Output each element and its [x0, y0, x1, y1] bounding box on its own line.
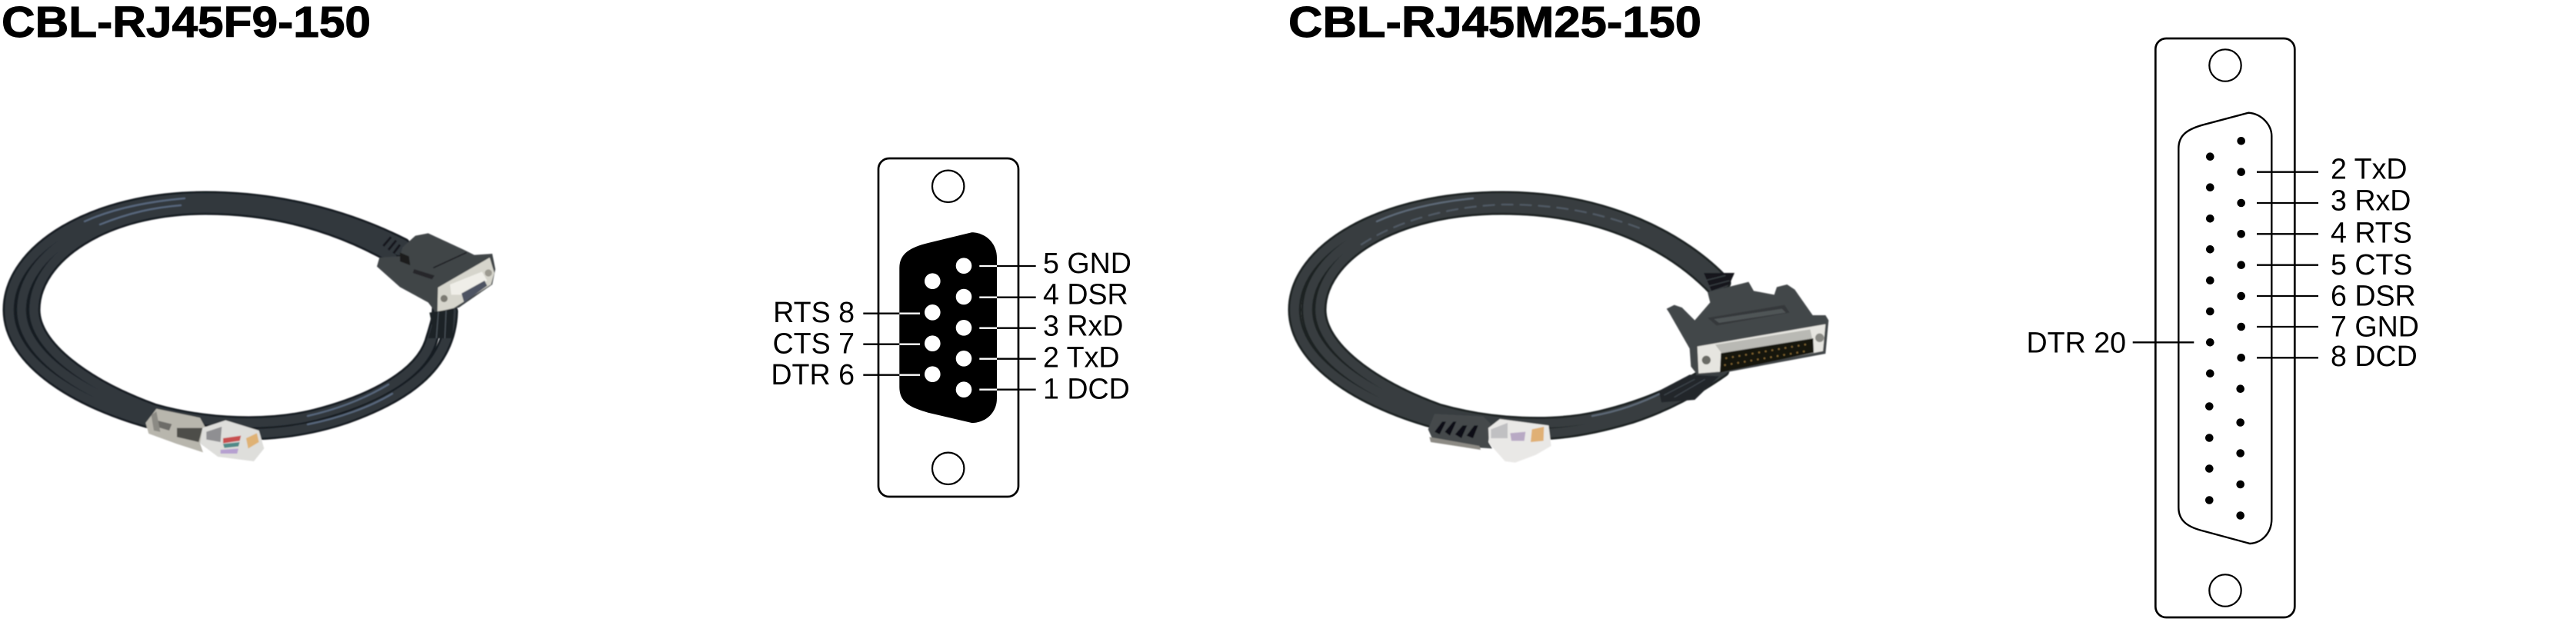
pin labels: 8 DCD	[2331, 340, 2418, 372]
pin labels: CTS 7	[772, 327, 855, 359]
pin labels: 6 DSR	[2331, 280, 2416, 312]
RJ45 plug with dark boot	[1428, 414, 1551, 463]
photo: DB9 female to RJ45 cable	[9, 198, 495, 461]
pin labels: RTS 8	[773, 296, 855, 328]
pin labels: 5 GND	[1043, 247, 1131, 279]
pin labels: 1 DCD	[1043, 372, 1130, 404]
mounting plate	[2155, 38, 2294, 617]
pin labels: 5 CTS	[2331, 248, 2412, 281]
photo: DB25 male to RJ45 cable	[1295, 198, 1828, 463]
pin labels: 4 DSR	[1043, 278, 1128, 311]
pinout: DB9 female	[771, 158, 1131, 497]
pin labels: 3 RxD	[2331, 185, 2411, 217]
mounting holes	[2209, 49, 2241, 607]
cable coil	[9, 198, 452, 434]
D-shell	[899, 232, 997, 423]
DB25 male connector	[1659, 273, 1828, 402]
pins	[2205, 137, 2245, 520]
cable coil	[1295, 198, 1725, 434]
leader lines	[863, 266, 1036, 390]
pin labels: DTR 20	[2027, 326, 2126, 358]
pin labels	[2027, 152, 2419, 372]
pin labels: 3 RxD	[1043, 310, 1123, 342]
pin labels: 4 RTS	[2331, 217, 2412, 249]
DB9 female connector	[377, 233, 495, 338]
mounting plate	[878, 158, 1018, 497]
pin labels: DTR 6	[771, 358, 855, 391]
pinout: DB25 male	[2027, 38, 2419, 617]
RJ45 plug with clear boot	[145, 409, 264, 461]
pin labels: 2 TxD	[2331, 152, 2408, 185]
mounting holes	[932, 171, 964, 484]
D-shell outline	[2178, 113, 2271, 544]
leader lines	[2133, 172, 2318, 358]
pins	[925, 258, 971, 397]
pin labels	[771, 247, 1131, 404]
pin labels: 2 TxD	[1043, 341, 1120, 373]
pin labels: 7 GND	[2331, 311, 2419, 343]
